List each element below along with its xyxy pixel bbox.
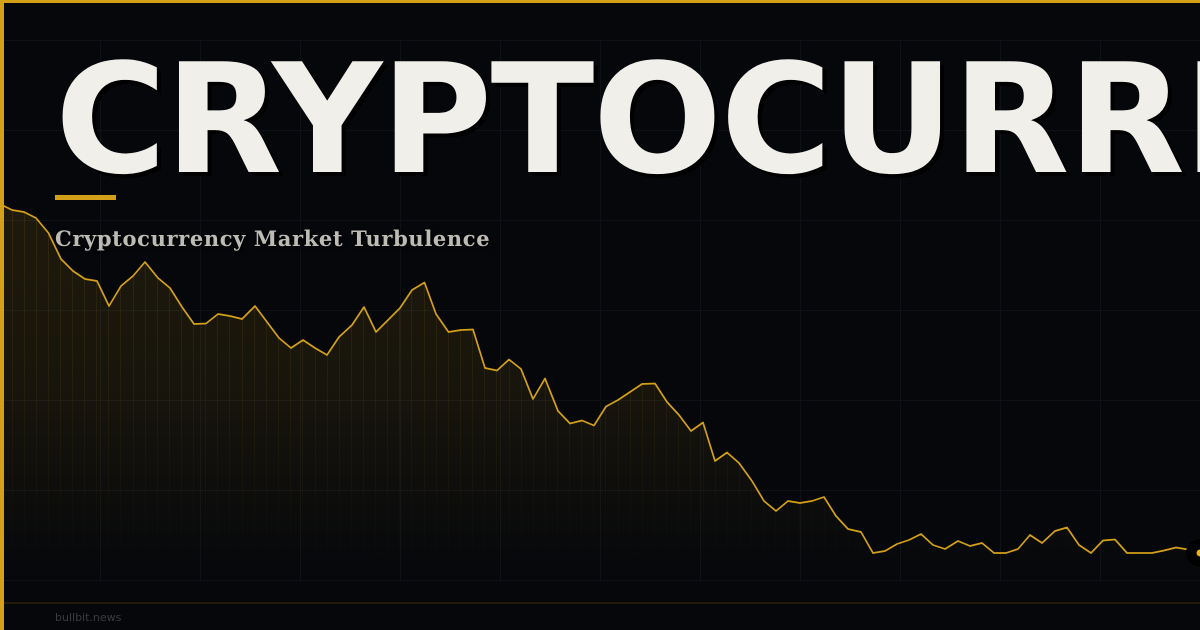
top border xyxy=(0,0,1200,3)
price line xyxy=(0,204,1200,553)
subtitle: Cryptocurrency Market Turbulence xyxy=(55,226,490,251)
left border xyxy=(0,0,4,630)
area fill under price line xyxy=(0,204,1200,580)
source label: bullbit.news xyxy=(55,611,121,624)
end point marker xyxy=(1186,539,1200,567)
footer rule xyxy=(0,602,1200,604)
vertical drop lines xyxy=(12,210,1188,580)
accent bar xyxy=(55,195,116,200)
